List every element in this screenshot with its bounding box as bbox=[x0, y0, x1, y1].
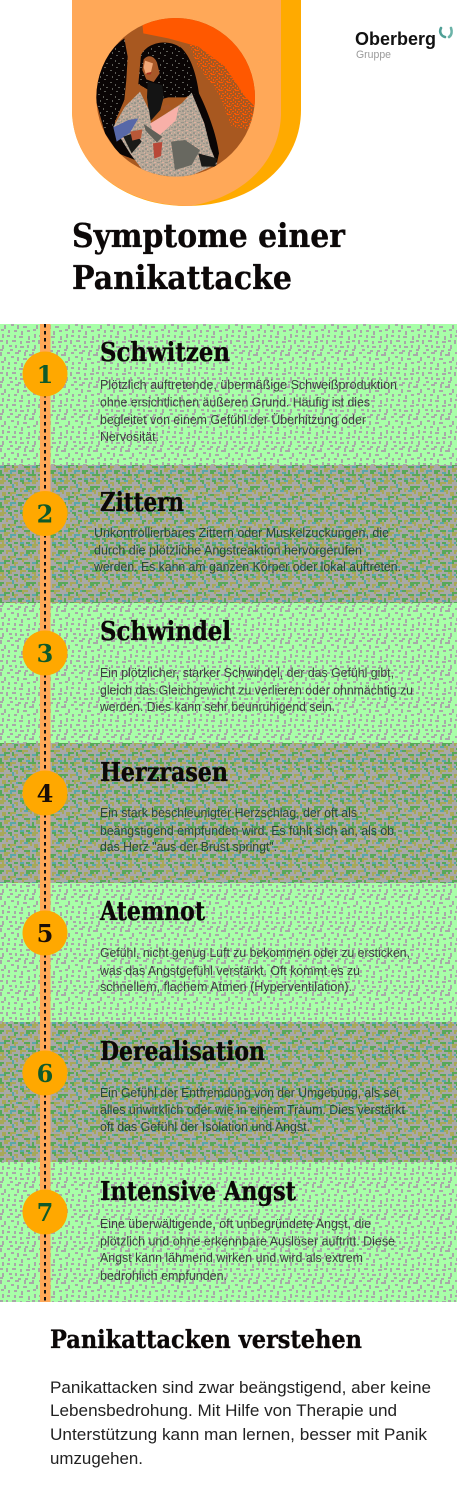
panel: Schwindel bbox=[22, 617, 413, 714]
body text: alles unwirklich oder wie in einem Traum. Dies verstärkt bbox=[100, 1102, 405, 1117]
body text bbox=[100, 805, 394, 854]
panel: Schwitzen bbox=[22, 338, 397, 444]
body text: durch die plötzliche Angstreaktion hervorgerufen bbox=[94, 542, 362, 558]
number badge 4 bbox=[22, 770, 68, 816]
main title: Symptome einer bbox=[72, 216, 346, 255]
main title bbox=[72, 216, 346, 297]
number badge 7 bbox=[22, 1190, 68, 1234]
body text: oft das Gefühl der Isolation und Angst. bbox=[100, 1119, 310, 1134]
footer text: Unterstützung kann man lernen, besser mit Panik bbox=[50, 1425, 427, 1444]
logo: Oberberg Gruppe bbox=[355, 28, 452, 61]
number badge 5 bbox=[22, 910, 68, 956]
heading: Atemnot bbox=[99, 897, 205, 927]
panel: Atemnot bbox=[22, 897, 410, 994]
body text: Ein stark beschleunigter Herzschlag, der oft als bbox=[100, 805, 357, 820]
logo wordmark: Oberberg bbox=[355, 29, 436, 49]
number badge 3: 3 bbox=[37, 639, 53, 668]
heading: Schwitzen bbox=[100, 338, 230, 368]
body text: ohne ersichtlichen äußeren Grund. Häufig ist dies bbox=[100, 394, 370, 410]
body text bbox=[100, 377, 397, 444]
body text: bedrohlich empfunden. bbox=[100, 1268, 227, 1283]
body text bbox=[99, 945, 410, 994]
body text: Eine überwältigende, oft unbegründete Angst, die bbox=[100, 1216, 371, 1231]
body text bbox=[100, 1216, 395, 1283]
symptom band backgrounds bbox=[0, 324, 457, 1302]
number badge 5: 5 bbox=[37, 919, 53, 948]
body text: beängstigend empfunden wird. Es fühlt sich an, als ob bbox=[100, 823, 394, 838]
heading: Schwindel bbox=[100, 617, 231, 647]
heading: Intensive Angst bbox=[100, 1177, 296, 1207]
panel: Derealisation bbox=[22, 1037, 405, 1134]
body text: plötzlich und ohne erkennbare Auslöser auftritt. Diese bbox=[100, 1234, 395, 1248]
logo subline: Gruppe bbox=[356, 49, 391, 61]
number badge 3 bbox=[22, 630, 68, 676]
heading: Zittern bbox=[100, 488, 184, 518]
number badge 7: 7 bbox=[37, 1198, 53, 1227]
photo: woman in coat in a round frame bbox=[95, 17, 258, 180]
body text: werden. Dies kann sehr beunruhigend sein. bbox=[99, 699, 335, 714]
footer text bbox=[50, 1378, 431, 1468]
footer text: Panikattacken sind zwar beängstigend, aber keine bbox=[50, 1378, 431, 1397]
footer text: Lebensbedrohung. Mit Hilfe von Therapie und bbox=[50, 1401, 397, 1420]
body text: das Herz "aus der Brust springt". bbox=[100, 839, 277, 854]
body text: Angst kann lähmend wirken und wird als extrem bbox=[100, 1250, 363, 1265]
logo icon bbox=[440, 28, 452, 37]
number badge 6 bbox=[22, 1050, 68, 1096]
heading: Derealisation bbox=[100, 1037, 265, 1067]
number badge 2 bbox=[22, 491, 68, 536]
body text: gleich das Gleichgewicht zu verlieren oder ohnmächtig zu bbox=[100, 682, 413, 698]
body text: was das Angstgefühl verstärkt. Oft kommt es zu bbox=[99, 963, 360, 978]
number badge 4: 4 bbox=[37, 779, 53, 808]
number badge 1 bbox=[22, 352, 68, 396]
body text bbox=[100, 1085, 405, 1134]
main title: Panikattacke bbox=[72, 258, 292, 297]
body text: werden. Es kann am ganzen Körper oder lokal auftreten. bbox=[93, 559, 401, 574]
panel: Herzrasen bbox=[22, 758, 394, 854]
body text: Unkontrollierbares Zittern oder Muskelzuckungen, die bbox=[94, 525, 389, 540]
number badge 2: 2 bbox=[37, 500, 53, 528]
body text: Plötzlich auftretende, übermäßige Schweißproduktion bbox=[100, 377, 397, 392]
timeline spine bbox=[40, 324, 50, 1302]
body text: Nervosität. bbox=[100, 429, 159, 444]
number badge 1: 1 bbox=[37, 360, 53, 389]
footer heading: Panikattacken verstehen bbox=[50, 1325, 362, 1354]
footer text: umzugehen. bbox=[50, 1449, 143, 1468]
body text: schnellem, flachem Atmen (Hyperventilation). bbox=[100, 979, 352, 994]
body text bbox=[99, 665, 413, 714]
panel: Intensive Angst bbox=[22, 1177, 395, 1283]
body text: Ein Gefühl der Entfremdung von der Umgebung, als sei bbox=[100, 1085, 399, 1100]
body text: begleitet von einem Gefühl der Überhitzung oder bbox=[100, 412, 367, 427]
header shield: yellow back shape bbox=[72, 0, 301, 206]
number badge 6: 6 bbox=[37, 1059, 53, 1088]
header shield: orange front shape bbox=[72, 0, 281, 206]
body text: Ein plötzlicher, starker Schwindel, der das Gefühl gibt, bbox=[100, 665, 394, 680]
body text bbox=[93, 525, 401, 574]
panel: Zittern bbox=[22, 488, 401, 574]
heading: Herzrasen bbox=[100, 758, 228, 788]
body text: Gefühl, nicht genug Luft zu bekommen oder zu ersticken, bbox=[100, 945, 410, 960]
